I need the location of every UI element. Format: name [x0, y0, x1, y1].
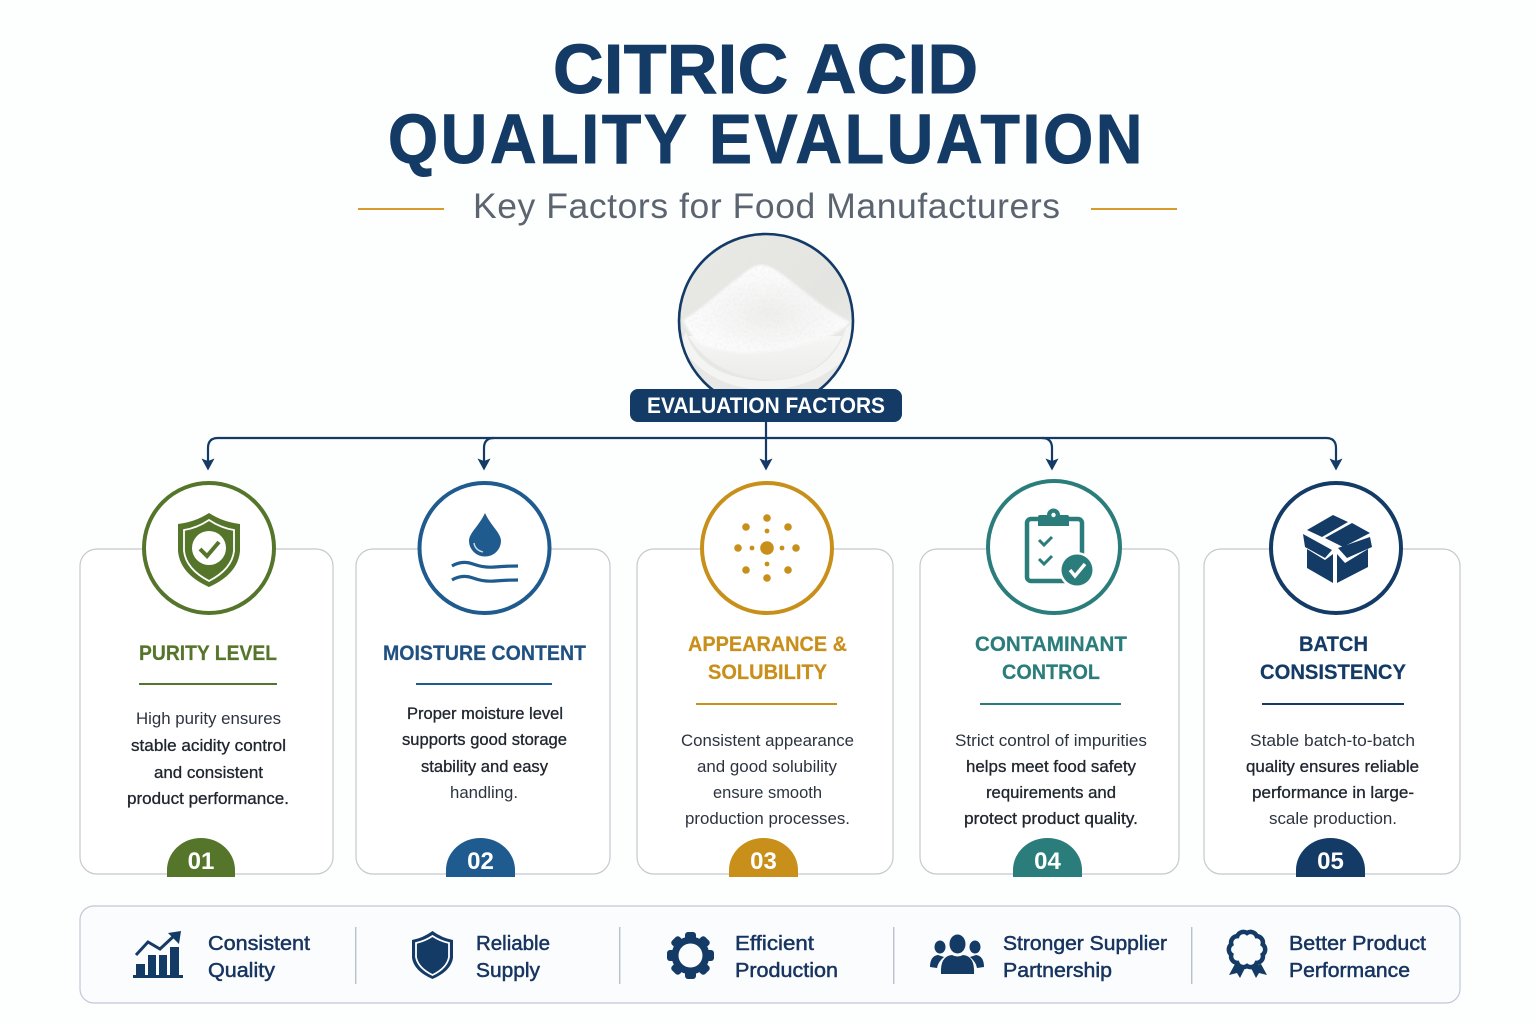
- description: scale production.: [1269, 810, 1397, 828]
- heading: [975, 633, 1127, 684]
- number tab 01: 01: [188, 848, 214, 875]
- heading: BATCH: [1299, 633, 1368, 656]
- heading: [688, 633, 847, 684]
- icon: shield: [412, 931, 453, 979]
- title: QUALITY EVALUATION: [388, 101, 1142, 179]
- description: protect product quality.: [964, 810, 1138, 828]
- panel: moisture content: [356, 483, 610, 877]
- heading: APPEARANCE &: [688, 633, 847, 656]
- description: production processes.: [685, 810, 850, 828]
- benefit: consistent quality: Quality: [208, 959, 276, 982]
- heading: PURITY LEVEL: [139, 642, 277, 665]
- icon: water drop and waves: [420, 483, 550, 613]
- number tab 04: 04: [1034, 848, 1061, 875]
- benefit: reliable supply: [412, 931, 550, 982]
- benefit: stronger supplier partnership: [930, 932, 1167, 982]
- benefit: stronger supplier partnership: Stronger Supplier: [1003, 932, 1167, 955]
- connector arrows: [202, 420, 1342, 470]
- benefit: stronger supplier partnership: Partnership: [1003, 959, 1112, 982]
- number tab 03: 03: [750, 848, 777, 875]
- icon: award ribbon: [1229, 932, 1267, 978]
- benefit: efficient production: [667, 932, 838, 982]
- description: [681, 732, 854, 828]
- panel: benefits bar: [80, 906, 1460, 1003]
- description: quality ensures reliable: [1246, 758, 1419, 776]
- icon: clipboard with check: [988, 481, 1120, 613]
- description: Consistent appearance: [681, 732, 854, 750]
- description: Stable batch-to-batch: [1250, 732, 1415, 750]
- description: and good solubility: [697, 758, 838, 776]
- description: [127, 710, 289, 808]
- benefit: efficient production: Efficient: [735, 932, 814, 955]
- title: [388, 30, 1142, 179]
- heading: [1260, 633, 1406, 684]
- title: CITRIC ACID: [553, 30, 978, 108]
- description: Strict control of impurities: [955, 732, 1147, 750]
- icon: gear: [667, 932, 714, 979]
- icon: rising chart: [133, 931, 183, 978]
- panel: appearance and solubility: [637, 483, 893, 877]
- central photo: citric acid powder in a bowl: [678, 232, 854, 389]
- description: handling.: [450, 784, 518, 802]
- icon: people: [930, 934, 984, 974]
- benefit: reliable supply: Reliable: [476, 932, 550, 955]
- heading: CONTROL: [1002, 661, 1100, 684]
- badge: evaluation factors: EVALUATION FACTORS: [647, 393, 885, 418]
- heading: CONTAMINANT: [975, 633, 1127, 656]
- panel: batch consistency: [1204, 483, 1460, 877]
- number tab 02: [446, 838, 515, 877]
- panel: purity level: [80, 483, 333, 877]
- benefit: consistent quality: [133, 931, 310, 982]
- benefit: better product performance: Better Product: [1289, 932, 1426, 955]
- benefit: efficient production: Production: [735, 959, 838, 982]
- description: requirements and: [986, 784, 1116, 802]
- heading: SOLUBILITY: [708, 661, 827, 684]
- heading: MOISTURE CONTENT: [383, 642, 586, 665]
- description: [955, 732, 1147, 828]
- heading: CONSISTENCY: [1260, 661, 1406, 684]
- description: helps meet food safety: [966, 758, 1137, 776]
- description: and consistent: [154, 764, 263, 782]
- description: Proper moisture level: [407, 705, 563, 723]
- benefit: consistent quality: Consistent: [208, 932, 310, 955]
- number tab 01: [167, 838, 235, 877]
- panel: contaminant control: [920, 481, 1179, 877]
- icon: open box: [1271, 483, 1401, 613]
- badge: evaluation factors: [630, 389, 902, 422]
- description: High purity ensures: [136, 710, 281, 728]
- number tab 03: [729, 838, 798, 877]
- number tab 05: 05: [1317, 848, 1344, 875]
- number tab 02: 02: [467, 848, 494, 875]
- description: ensure smooth: [713, 784, 822, 802]
- description: product performance.: [127, 790, 289, 808]
- subtitle: Key Factors for Food Manufacturers: [473, 186, 1060, 226]
- icon: particles: [702, 483, 832, 613]
- benefit: reliable supply: Supply: [476, 959, 541, 982]
- benefit: better product performance: [1229, 932, 1426, 982]
- number tab 05: [1296, 838, 1365, 877]
- icon: shield with check: [144, 483, 274, 613]
- benefit: better product performance: Performance: [1289, 959, 1410, 982]
- description: stable acidity control: [131, 737, 286, 755]
- description: [402, 705, 567, 802]
- description: supports good storage: [402, 731, 567, 749]
- description: stability and easy: [421, 758, 549, 776]
- number tab 04: [1013, 838, 1082, 877]
- description: [1246, 732, 1419, 828]
- description: performance in large-: [1252, 784, 1414, 802]
